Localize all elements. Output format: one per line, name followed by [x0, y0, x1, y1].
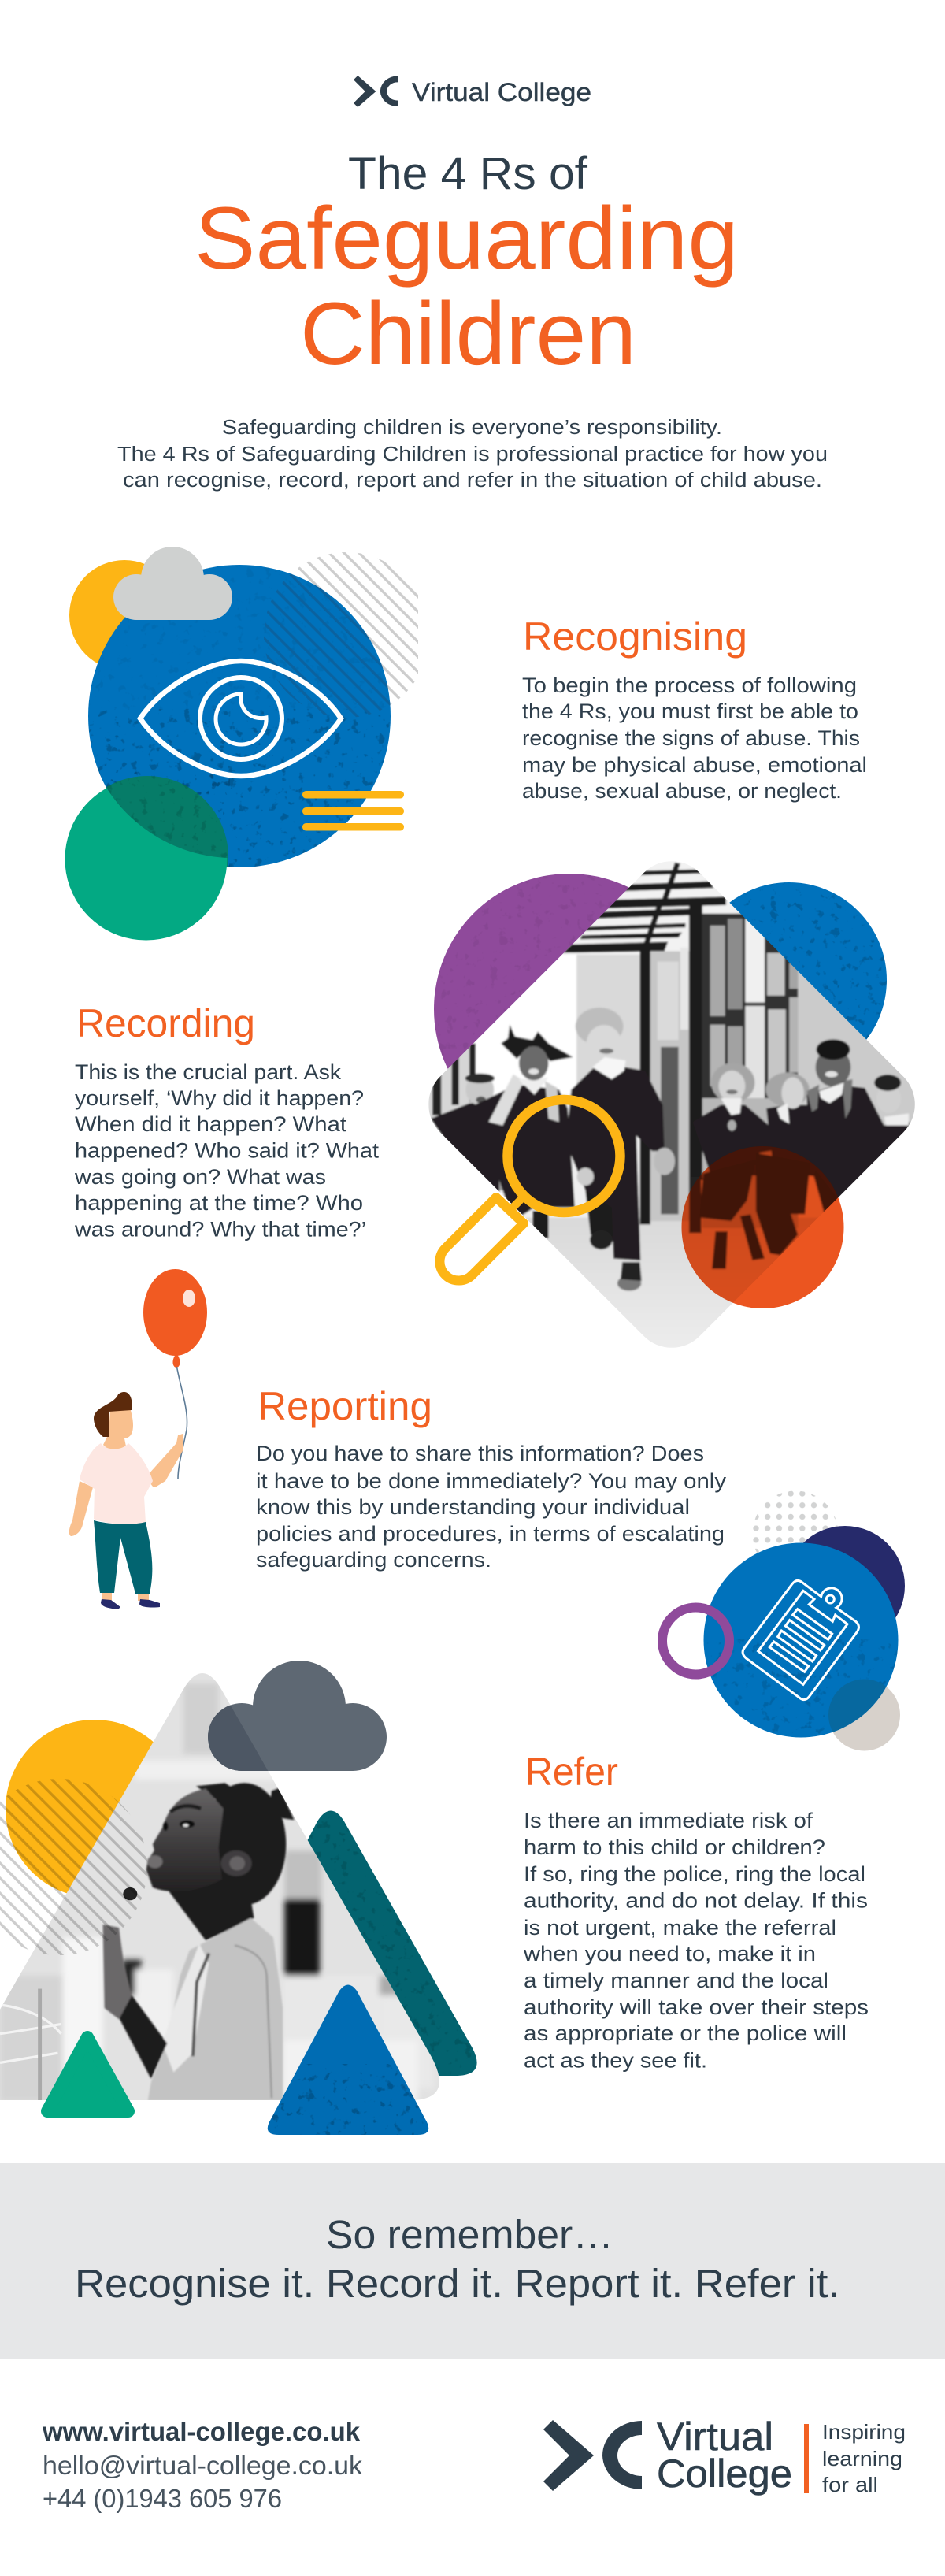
section: recognising: may be physical abuse, emotional: [522, 753, 867, 777]
grey cloud: [113, 547, 232, 620]
section: recognising: abuse, sexual abuse, or neglect.: [522, 779, 842, 803]
section: recording: This is the crucial part. Ask: [75, 1060, 342, 1084]
face: [146, 1789, 224, 1891]
girl with black hair: [475, 1085, 575, 1221]
teal triangle: [307, 1810, 477, 2076]
right arm: [148, 1434, 183, 1487]
section: recording: happening at the time? Who: [75, 1191, 363, 1215]
section: reporting: Do you have to share this information? Does: [256, 1442, 704, 1465]
section: recognising: To begin the process of following: [522, 674, 857, 697]
navy circle: [785, 1526, 905, 1646]
section: reporting: know this by understanding your individual: [256, 1495, 690, 1519]
footer contact details: hello@virtual-college.co.uk: [43, 2451, 363, 2480]
purple ring: [662, 1607, 729, 1675]
shoes: [101, 1599, 160, 1609]
header logo: [354, 76, 591, 107]
header logo: Virtual College: [412, 78, 591, 106]
title: The 4 Rs of: [348, 148, 588, 199]
right group girl two: [765, 1072, 810, 1107]
photo: running school children: [428, 862, 915, 1348]
right group girl one: [711, 1063, 754, 1103]
far right boy: [883, 1121, 910, 1134]
section: recording: happened? Who said it? What: [75, 1139, 380, 1163]
shirt: [80, 1443, 153, 1524]
trousers: [94, 1520, 152, 1594]
illustration: recognising eye circles: [69, 547, 418, 867]
panel: so remember banner: Recognise it. Record it. Report it. Refer it.: [75, 2261, 839, 2306]
footer logo: Inspiring: [822, 2420, 906, 2444]
orange circle tint: [682, 1146, 844, 1308]
section: refer: Is there an immediate risk of: [524, 1809, 813, 1832]
purple circle: [434, 874, 705, 1145]
blue circle: [88, 565, 391, 867]
section: recording: yourself, ‘Why did it happen?: [75, 1086, 364, 1110]
photo: girl looking up: [0, 1673, 439, 2100]
section: recording: [74, 1001, 380, 1242]
section: reporting: [256, 1384, 727, 1572]
blond boy: [576, 1008, 623, 1045]
balloon: [143, 1269, 207, 1356]
orange circle: [682, 1146, 844, 1308]
section: recognising: Recognising: [523, 614, 747, 659]
purple texture: [501, 901, 600, 994]
section: recording: Recording: [76, 1001, 255, 1045]
section: recognising: recognise the signs of abuse. This: [522, 726, 860, 750]
sweater: [148, 1918, 283, 2101]
section: refer: authority, and do not delay. If this: [524, 1889, 868, 1913]
section: refer: is not urgent, make the referral: [524, 1916, 836, 1939]
green triangle: [47, 2037, 128, 2111]
intro text: can recognise, record, report and refer in the situation of child abuse.: [123, 470, 822, 492]
neck: [167, 1880, 254, 1940]
section: recording: When did it happen? What: [75, 1112, 347, 1136]
section: refer: as appropriate or the police will: [524, 2021, 847, 2045]
section: refer: a timely manner and the local: [524, 1969, 828, 1992]
section: reporting: safeguarding concerns.: [256, 1548, 491, 1572]
left boy: [431, 1101, 499, 1193]
intro text: Safeguarding children is everyone’s responsibility.: [222, 417, 722, 439]
brow and eye: [170, 1806, 201, 1812]
building: [650, 951, 689, 1221]
panel: so remember banner: So remember…: [326, 2212, 613, 2257]
balloon string: [176, 1367, 187, 1479]
panel: so remember banner: [0, 2163, 945, 2359]
dark cloud overlap: [208, 1705, 268, 1771]
left arm: [69, 1481, 93, 1536]
yellow circle: [69, 560, 180, 670]
illustration: children photo diamond: [428, 862, 915, 1348]
section: reporting: it have to be done immediately? You may only: [256, 1469, 727, 1493]
blue circle: [691, 882, 887, 1078]
face: [103, 1408, 133, 1451]
illustration: clipboard circles: [662, 1490, 905, 1750]
footer logo: learning: [822, 2447, 902, 2470]
section: refer: act as they see fit.: [524, 2048, 707, 2072]
blue circle texture: [88, 567, 391, 867]
blue triangle texture: [267, 2064, 429, 2136]
footer contact details: www.virtual-college.co.uk: [42, 2417, 361, 2446]
blue triangle: [268, 1985, 428, 2135]
section: refer: Refer: [525, 1750, 618, 1794]
icon: magnifying glass: [439, 1100, 621, 1281]
section: refer: authority will take over their steps: [524, 1995, 869, 2019]
ankles: [102, 1593, 149, 1601]
beige circle: [828, 1680, 900, 1750]
hair: [202, 1783, 286, 1905]
section: refer: If so, ring the police, ring the local: [524, 1862, 865, 1886]
tall boy: [806, 1086, 885, 1208]
dark cloud: [208, 1661, 387, 1771]
footer logo: College: [657, 2452, 792, 2496]
green circle outside blue: [65, 788, 227, 941]
section: refer: harm to this child or children?: [524, 1835, 825, 1859]
section: recognising: [522, 614, 867, 803]
blue circle: [704, 1542, 898, 1738]
legs under orange circle: [699, 1153, 836, 1269]
blue texture: [732, 882, 887, 1040]
intro text: [117, 417, 828, 492]
footer logo: [543, 2415, 906, 2496]
hatched circle: [291, 552, 418, 705]
dotted circle: [753, 1490, 838, 1577]
footer logo: for all: [822, 2473, 878, 2496]
arm and hand: [119, 1995, 167, 2079]
footer contact details: +44 (0)1943 605 976: [43, 2484, 282, 2513]
section: recognising: the 4 Rs, you must first be able to: [522, 700, 858, 723]
teal texture: [310, 1810, 474, 2070]
section: refer: when you need to, make it in: [523, 1942, 816, 1965]
intro text: The 4 Rs of Safeguarding Children is professional practice for how you: [117, 444, 828, 466]
section: reporting: Reporting: [258, 1384, 432, 1428]
blue circle texture and overlap: [706, 1639, 898, 1734]
yellow circle: [6, 1720, 183, 1898]
section: refer: [523, 1750, 869, 2072]
icon: clipboard: [743, 1580, 858, 1700]
title: Safeguarding: [195, 189, 739, 288]
section: recording: was around? Why that time?’: [74, 1218, 366, 1242]
illustration: boy with balloon: [69, 1269, 207, 1609]
footer contact details: [42, 2417, 363, 2513]
title: Children: [300, 284, 636, 383]
section: reporting: policies and procedures, in terms of escalating: [256, 1522, 724, 1546]
hatched circle: [0, 1779, 147, 1955]
footer logo: Virtual: [657, 2415, 773, 2459]
title: [195, 148, 739, 383]
illustration: girl photo triangle: [0, 1661, 477, 2135]
yellow bars: [302, 791, 404, 830]
section: recording: was going on? What was: [74, 1165, 326, 1189]
icon: eye: [140, 661, 341, 776]
hair: [94, 1392, 132, 1437]
